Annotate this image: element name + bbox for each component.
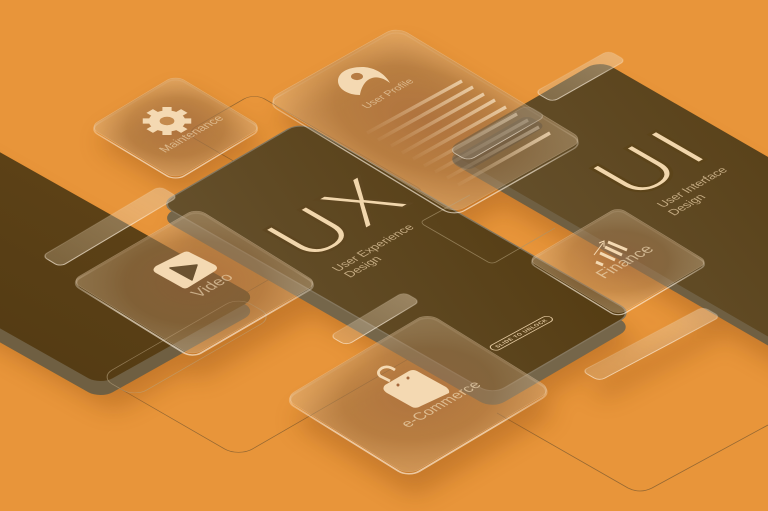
label: finance: Finance	[592, 243, 658, 281]
label: video: Video	[188, 271, 238, 300]
label: user interface design: User Interface	[653, 165, 731, 210]
tab: lower right glass bar	[582, 307, 721, 381]
label: user interface design: Design	[664, 192, 709, 218]
label: user profile: User Profile	[360, 78, 417, 111]
icon: play button	[154, 252, 217, 288]
heading: UI: UI	[570, 115, 733, 209]
slide to unlock pill: SLIDE TO UNLOCK	[494, 318, 550, 349]
icon: bar chart with arrow	[594, 241, 627, 265]
tab: left glass bar	[42, 186, 178, 267]
label: maintenance: Maintenance	[155, 113, 227, 155]
icon: user avatar	[338, 67, 390, 95]
card: user profile	[267, 26, 584, 216]
label: e-commerce: e-Commerce	[398, 379, 485, 430]
inner outline on left phone	[100, 297, 273, 397]
tab: middle glass bar	[330, 292, 420, 346]
screen: UI design	[445, 60, 768, 409]
card: video	[71, 208, 318, 358]
tab: top right glass bar	[535, 50, 626, 102]
icon: gear	[132, 101, 202, 141]
icon: shopping bag	[378, 367, 449, 408]
screen: UX design	[160, 122, 633, 409]
screen: left phone	[0, 95, 257, 399]
glass pill over lines	[449, 105, 546, 171]
text lines	[367, 81, 550, 185]
heading: UX: UX	[243, 164, 429, 271]
card: maintenance	[89, 75, 262, 181]
card: finance	[528, 207, 708, 317]
connector outlines	[100, 93, 768, 491]
label: user experience design: User Experience	[328, 222, 418, 274]
inner outline on UX screen	[422, 195, 555, 263]
card: e-commerce	[284, 313, 552, 477]
slide to unlock pill	[488, 315, 555, 352]
label: user experience design: Design	[340, 254, 385, 280]
